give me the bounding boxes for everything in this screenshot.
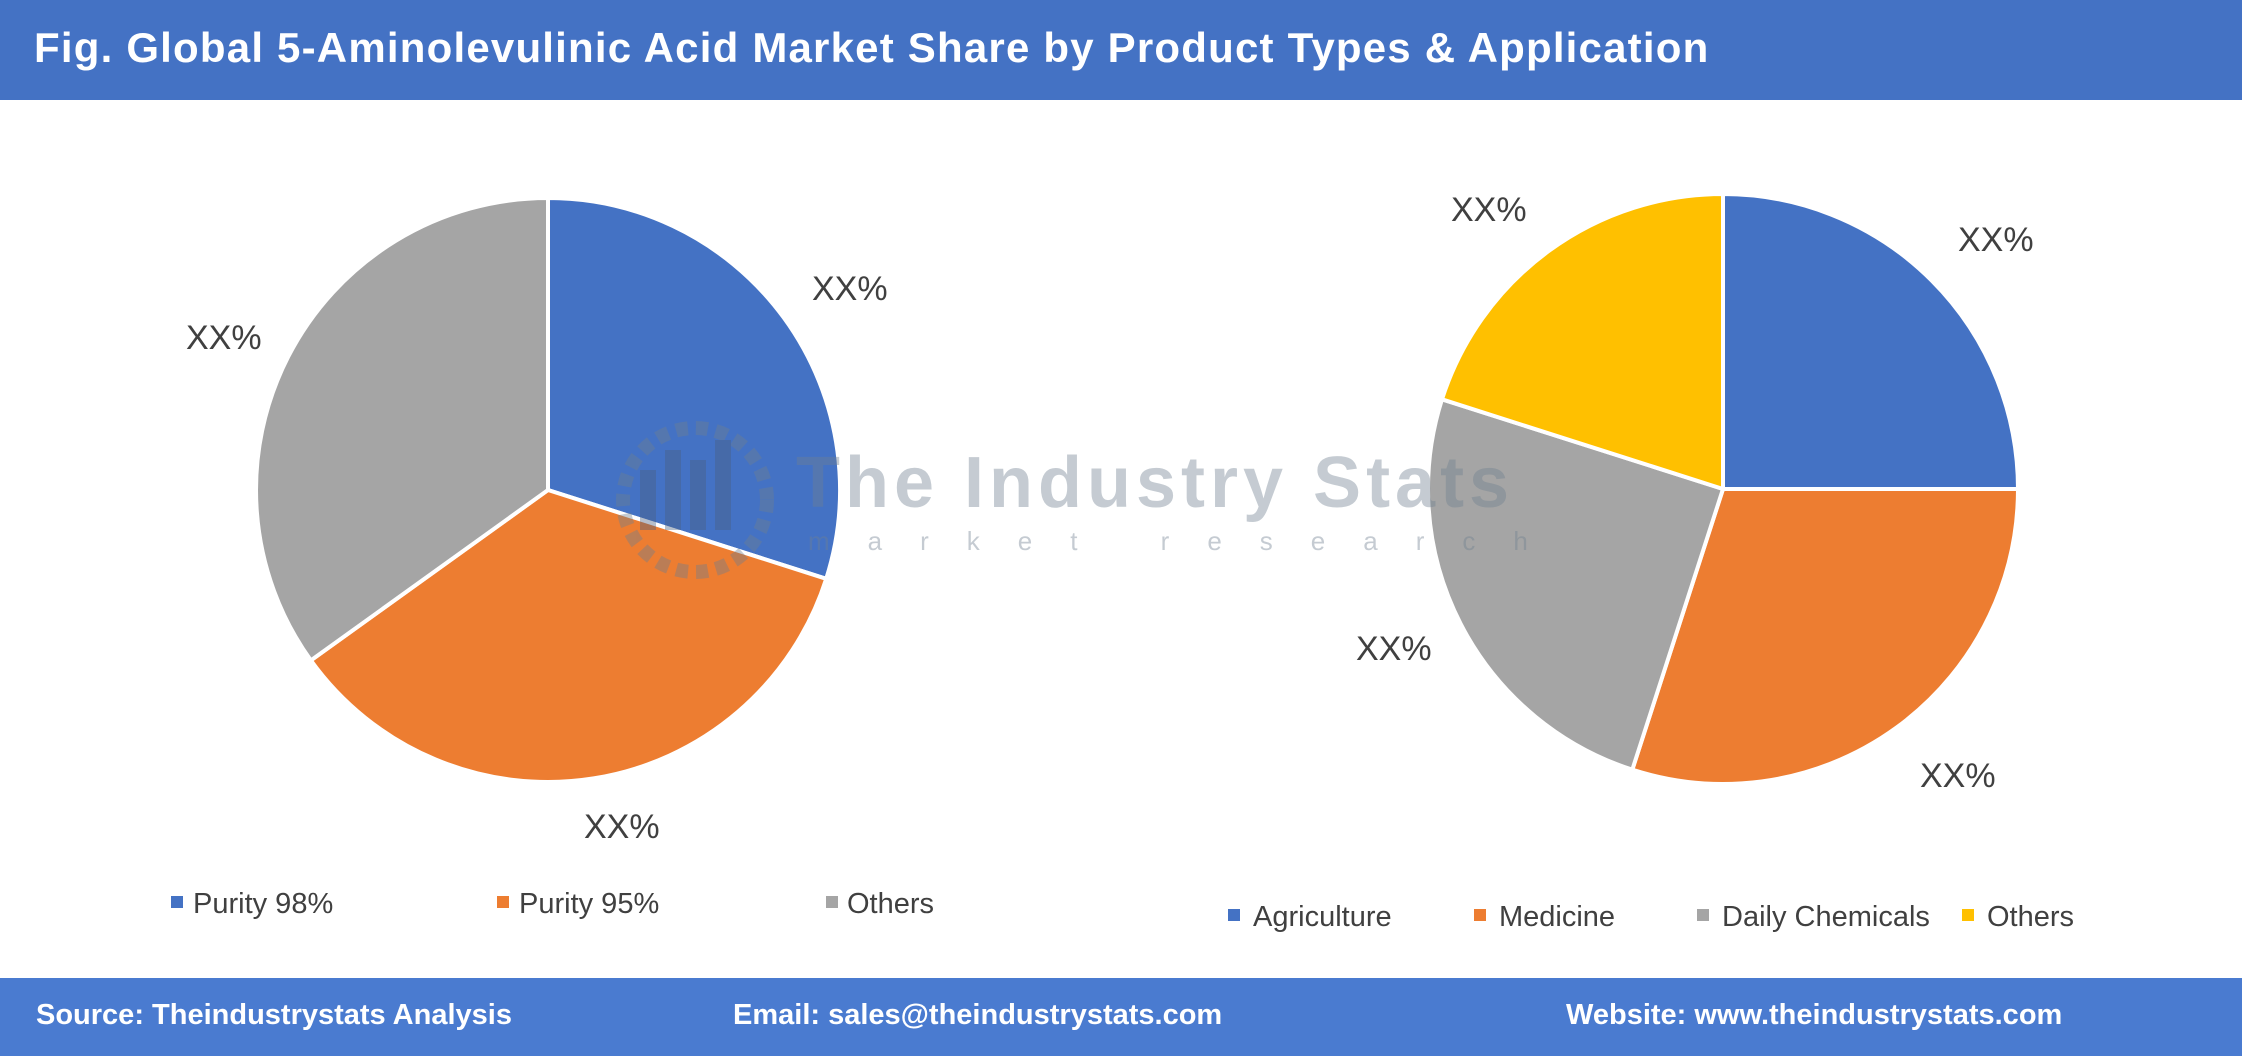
watermark xyxy=(623,428,1566,572)
watermark: The Industry Stats xyxy=(796,443,1514,523)
email: Email: sales@theindustrystats.com xyxy=(733,999,1222,1031)
right pie chart: application xyxy=(1428,194,2018,784)
header bar xyxy=(0,0,2242,100)
legend: left: Purity 98% xyxy=(193,888,333,920)
legend: right xyxy=(1228,901,2074,933)
pie labels: XX% xyxy=(1356,630,1432,668)
pie labels: XX% xyxy=(186,319,262,357)
source: Source: Theindustrystats Analysis xyxy=(36,999,512,1031)
pie labels xyxy=(186,191,2034,846)
legend: right: Daily Chemicals xyxy=(1722,901,1930,933)
pie labels: XX% xyxy=(1958,221,2034,259)
pie labels: XX% xyxy=(1451,191,1527,229)
pie labels: XX% xyxy=(584,808,660,846)
footer bar xyxy=(0,978,2242,1056)
pie labels: XX% xyxy=(812,270,888,308)
legend: right: Medicine xyxy=(1499,901,1615,933)
legend: left xyxy=(171,888,934,920)
legend: left: Others xyxy=(847,888,934,920)
legend: right: Agriculture xyxy=(1253,901,1392,933)
legend: left: Purity 95% xyxy=(519,888,659,920)
left pie chart: product types xyxy=(256,198,840,782)
website: Website: www.theindustrystats.com xyxy=(1566,999,2062,1031)
pie labels: XX% xyxy=(1920,757,1996,795)
watermark: market research xyxy=(808,526,1566,556)
title: Fig. Global 5-Aminolevulinic Acid Market Share by Product Types & Application xyxy=(34,24,1709,71)
legend: right: Others xyxy=(1987,901,2074,933)
